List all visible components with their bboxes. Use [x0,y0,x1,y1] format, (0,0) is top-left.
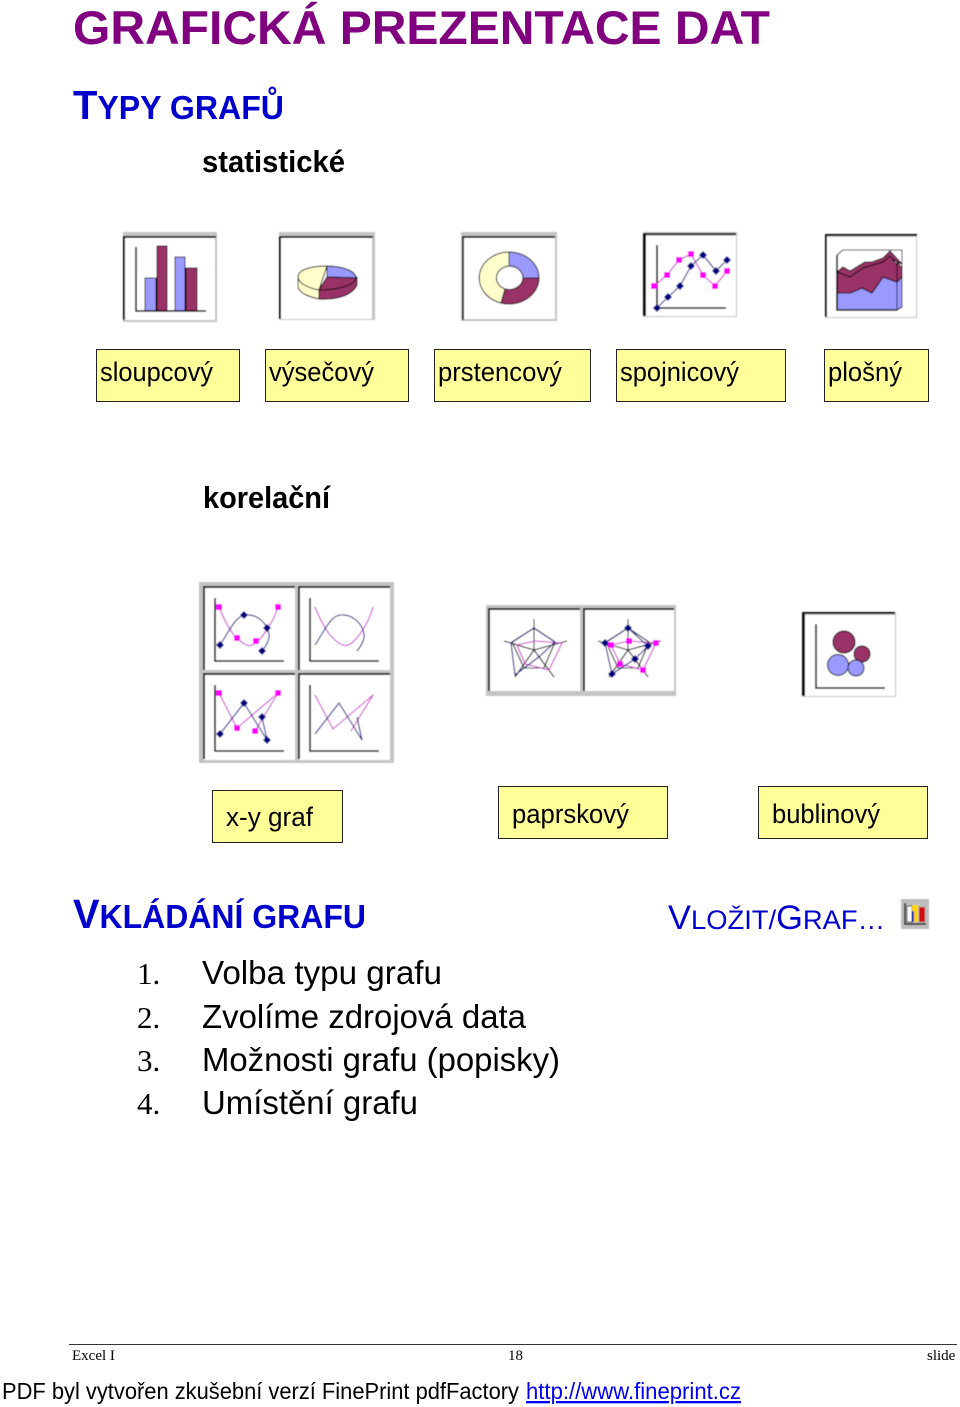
pdf notice: PDF byl vytvořen zkušební verzí FinePrint pdfFactory [2,1378,519,1404]
icon: x-y chart group [199,582,394,763]
numbered list: 4. [137,1086,160,1121]
icon: chart wizard button [901,899,929,929]
label: plošný: plošný [828,357,902,387]
numbered list: 1. [137,956,160,991]
label: spojnicový: spojnicový [620,357,739,387]
page footer: slide [927,1348,956,1364]
subheading: korelační: korelační [203,480,331,515]
icon: radar chart group [486,605,676,696]
label: bublinový [758,786,928,838]
menu path: vložit/graf: VLOŽIT/GRAF… [668,899,885,937]
icon: doughnut chart [461,232,557,321]
numbered list: Možnosti grafu (popisky) [202,1041,560,1078]
subheading: statistické: statistické [202,144,345,179]
title: GRAFICKÁ PREZENTACE DAT [73,1,770,55]
pdf notice: http://www.fineprint.cz [526,1378,741,1404]
label: výsečový [266,350,408,402]
page footer [69,1344,957,1364]
label: paprskový: paprskový [512,799,629,829]
numbered list [137,954,560,1121]
icon: bubble chart [802,612,896,697]
numbered list: Zvolíme zdrojová data [202,998,527,1035]
heading: typy grafů: TYPY GRAFŮ [73,82,284,128]
icon: column chart [123,232,217,322]
icon: line chart [643,232,737,317]
label: plošný [824,350,928,402]
label: bublinový: bublinový [772,799,880,829]
label: paprskový [498,786,668,838]
label: x-y graf: x-y graf [226,802,313,832]
numbered list: 3. [137,1043,160,1078]
numbered list: Umístění grafu [202,1084,418,1121]
page footer: Excel I [72,1348,115,1364]
icon: pie chart [279,232,375,320]
page footer: 18 [508,1348,523,1364]
icon: area chart [825,234,917,318]
label: sloupcový [96,350,240,402]
label: prstencový [434,350,590,402]
label: x-y graf [212,790,342,842]
label: prstencový: prstencový [438,357,562,387]
numbered list: 2. [137,1000,160,1035]
label: spojnicový [616,350,786,402]
numbered list: Volba typu grafu [202,954,442,991]
label: výsečový: výsečový [269,357,374,387]
label: sloupcový: sloupcový [100,357,213,387]
heading: vkládání grafu: VKLÁDÁNÍ GRAFU [73,891,366,937]
